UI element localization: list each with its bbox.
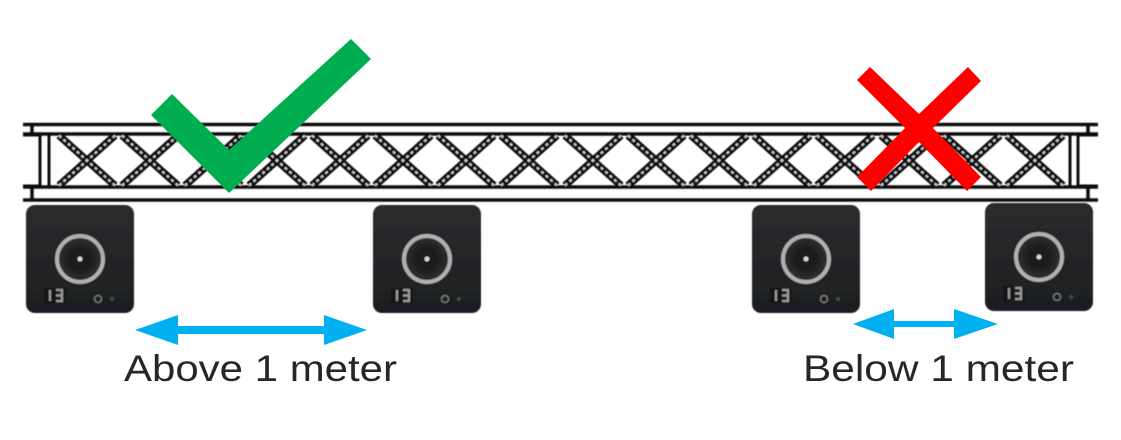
truss xyxy=(23,124,1098,200)
arrow: below 1 meter span xyxy=(853,309,998,339)
camera 3 xyxy=(752,205,860,313)
label: below 1 meter: Below 1 meter xyxy=(803,348,1074,389)
truss cross bracing xyxy=(59,136,1063,186)
arrow: above 1 meter span xyxy=(135,315,367,345)
camera 2 xyxy=(373,205,481,313)
camera 4 xyxy=(985,203,1093,311)
truss rails xyxy=(23,124,1098,200)
camera 1 xyxy=(26,205,134,313)
icon: green check mark xyxy=(151,39,371,193)
icon: red cross xyxy=(857,67,981,191)
label: above 1 meter: Above 1 meter xyxy=(124,348,397,389)
